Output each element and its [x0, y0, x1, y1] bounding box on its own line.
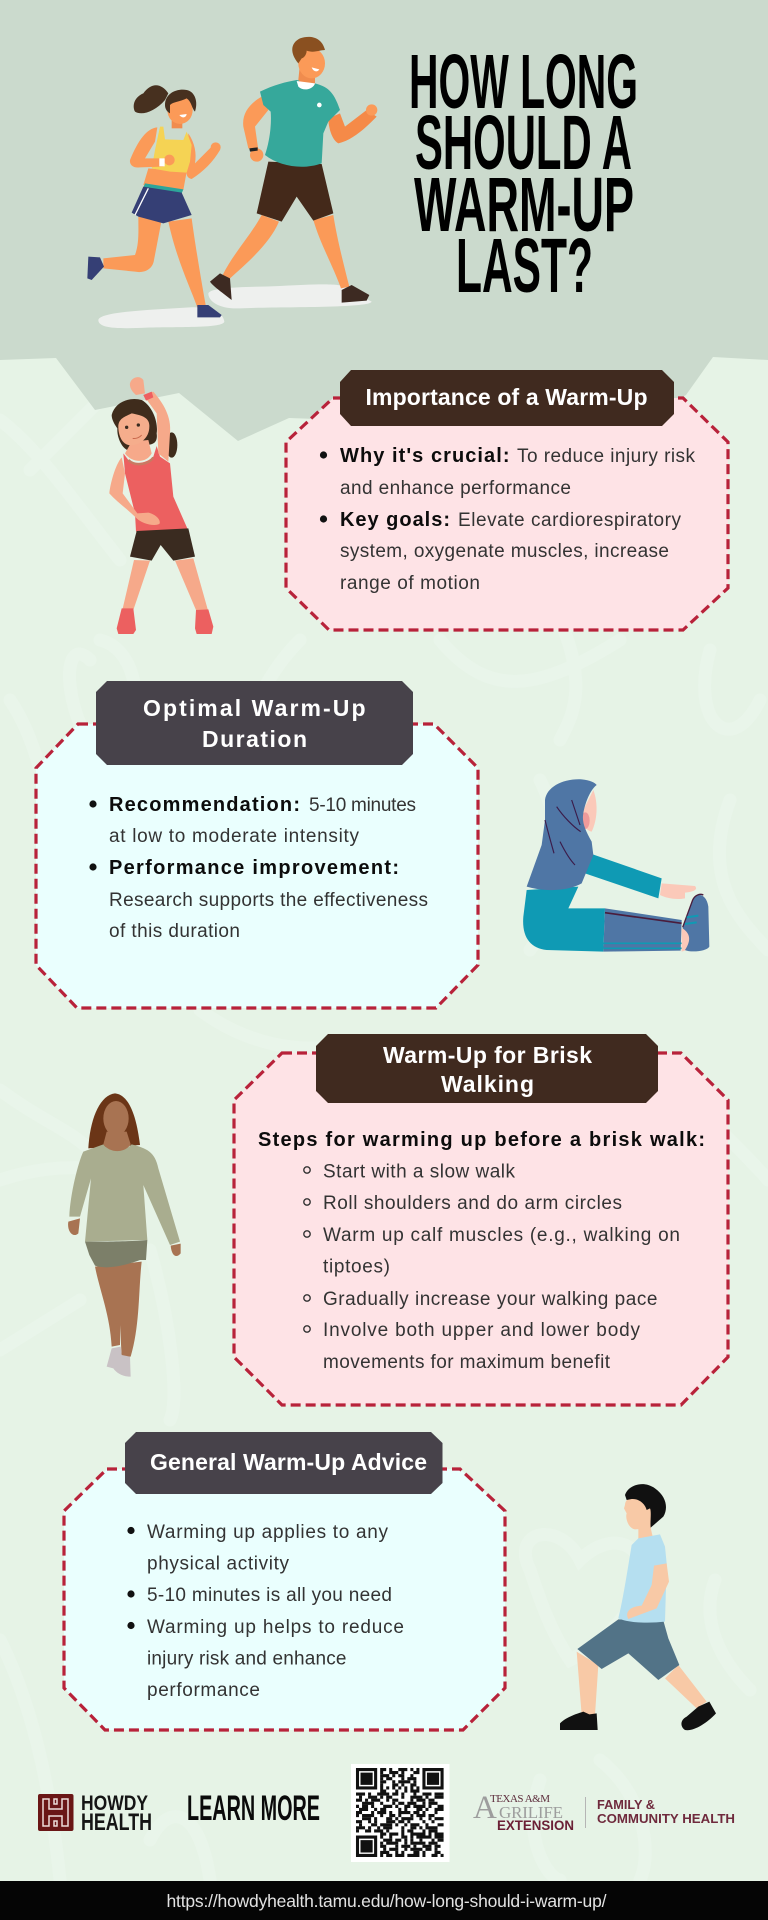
text: duration bullets: 5-10 minutes: [309, 795, 416, 816]
heading: general warm-up advice: General Warm-Up Advice: [150, 1449, 427, 1475]
qr code: [351, 1764, 450, 1862]
illustration: woman seated stretch: [523, 779, 709, 952]
text: general advice bullets: injury risk and enhance: [147, 1649, 346, 1670]
title: [409, 39, 638, 309]
text: duration bullets: at low to moderate intensity: [109, 826, 360, 847]
text: importance bullets: Why it's crucial:: [340, 445, 510, 467]
text: importance bullets: range of motion: [340, 573, 480, 594]
man runner: [210, 37, 377, 303]
text: importance bullets: Key goals:: [340, 509, 450, 531]
illustration: two runners: [87, 37, 377, 328]
panel: optimal warm-up duration: [36, 681, 478, 1008]
footer bar with url: [0, 1881, 768, 1920]
text: general advice bullets: physical activity: [147, 1554, 290, 1575]
heading: warm-up for brisk walking: Walking: [441, 1071, 534, 1097]
text: importance bullets: system, oxygenate muscles, increase: [340, 541, 669, 562]
illustration: walking woman: [68, 1093, 181, 1377]
illustration: boy lunging: [560, 1484, 716, 1730]
footer bar with url: https://howdyhealth.tamu.edu/how-long-should-i-warm-up/: [166, 1891, 607, 1911]
panel: warm-up for brisk walking: [234, 1034, 728, 1405]
title: LAST?: [456, 223, 593, 309]
text: duration bullets: Research supports the effectiveness: [109, 890, 428, 911]
heading: importance of a warm-up: Importance of a Warm-Up: [366, 384, 648, 410]
text: duration bullets: Recommendation:: [109, 794, 300, 816]
text: brisk walk steps: Start with a slow walk: [323, 1162, 516, 1182]
text: duration bullets: of this duration: [109, 921, 240, 942]
logo: texas a&m agrilife extension family & community health: FAMILY &: [597, 1798, 655, 1812]
text: general advice bullets: 5-10 minutes is all you need: [147, 1585, 392, 1606]
illustration: woman side stretch: [109, 377, 213, 634]
text: importance bullets: To reduce injury risk: [517, 446, 696, 467]
text: brisk walk steps: tiptoes): [323, 1256, 390, 1278]
text: brisk walk steps: Roll shoulders and do arm circles: [323, 1193, 622, 1214]
heading: optimal warm-up duration: Duration: [202, 726, 307, 752]
text: brisk walk steps: Gradually increase your walking pace: [323, 1289, 658, 1310]
text: general advice bullets: [127, 1522, 404, 1701]
heading: general warm-up advice: [125, 1432, 442, 1494]
woman runner: [87, 85, 222, 317]
logo: texas a&m agrilife extension family & community health: [473, 1790, 735, 1833]
text: general advice bullets: Warming up helps to reduce: [147, 1617, 404, 1638]
logo: texas a&m agrilife extension family & community health: EXTENSION: [497, 1818, 574, 1833]
logo: texas a&m agrilife extension family & community health: TEXAS A&M: [490, 1793, 550, 1805]
text: brisk walk steps: Warm up calf muscles (e.g., walking on: [323, 1225, 680, 1246]
heading: importance of a warm-up: [340, 370, 674, 426]
text: brisk walk steps: [258, 1129, 705, 1373]
text: brisk walk steps: movements for maximum benefit: [323, 1352, 611, 1373]
logo: howdy health: [38, 1791, 152, 1836]
text: brisk walk steps: Steps for warming up before a brisk walk:: [258, 1129, 705, 1151]
text: duration bullets: Performance improvement:: [109, 857, 399, 879]
text: general advice bullets: Warming up applies to any: [147, 1522, 388, 1543]
heading: warm-up for brisk walking: Warm-Up for Brisk: [383, 1042, 592, 1068]
text: importance bullets: Elevate cardiorespiratory: [458, 510, 682, 531]
logo: howdy health: HEALTH: [81, 1809, 152, 1836]
logo: texas a&m agrilife extension family & community health: COMMUNITY HEALTH: [597, 1812, 735, 1826]
panel: general warm-up advice: [64, 1432, 505, 1730]
text: general advice bullets: performance: [147, 1680, 260, 1701]
panel: importance of a warm-up: [286, 370, 728, 630]
heading: warm-up for brisk walking: [316, 1034, 658, 1103]
text: importance bullets: [320, 445, 696, 594]
learn more label: LEARN MORE: [187, 1789, 320, 1828]
heading: optimal warm-up duration: [96, 681, 413, 765]
text: brisk walk steps: Involve both upper and lower body: [323, 1320, 640, 1341]
text: importance bullets: and enhance performance: [340, 478, 571, 499]
top header band: [0, 0, 768, 441]
text: duration bullets: [89, 794, 428, 942]
logo: texas a&m agrilife extension family & community health: A: [473, 1790, 497, 1826]
logo: howdy health: HOWDY: [81, 1791, 148, 1815]
logo: texas a&m agrilife extension family & community health: GRILIFE: [499, 1803, 563, 1822]
heading: optimal warm-up duration: Optimal Warm-Up: [143, 695, 366, 721]
